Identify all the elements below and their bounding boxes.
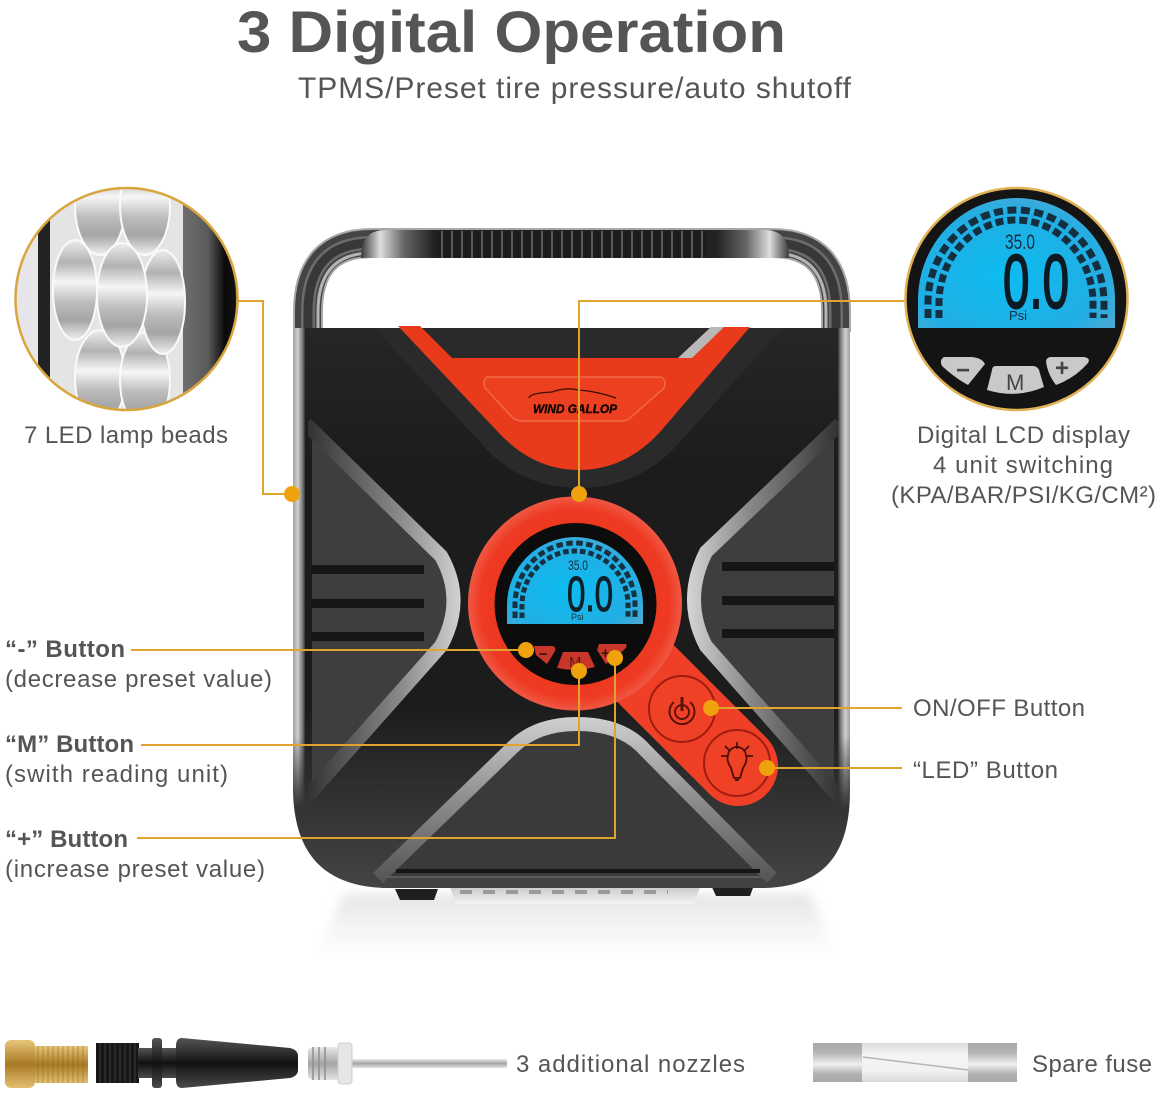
LCD plus button — [1046, 355, 1089, 385]
black cone nozzle — [96, 1038, 298, 1088]
gauge ring — [468, 496, 682, 710]
tire inflator product — [293, 230, 850, 958]
small plus button: + — [601, 645, 610, 662]
small LCD preset value: 35.0 — [568, 557, 588, 573]
minus button label — [5, 636, 272, 693]
handle grip — [361, 230, 789, 258]
brand name: WIND GALLOP — [533, 402, 618, 416]
spare fuse label: Spare fuse — [1032, 1051, 1152, 1078]
leader line: M button — [141, 671, 579, 745]
body — [293, 328, 850, 888]
LCD tick rings — [928, 210, 1104, 318]
brand car outline — [529, 389, 616, 398]
small plus button — [597, 644, 627, 664]
plus button label — [5, 826, 265, 883]
LED button label: “LED” Button — [913, 757, 1058, 784]
top red housing — [374, 326, 782, 488]
gauge face — [494, 523, 656, 685]
leader line: LED button — [767, 767, 902, 769]
vent strip — [446, 876, 704, 904]
rubber feet — [395, 885, 754, 900]
leader line: power button — [711, 707, 902, 709]
leader line: LCD — [579, 301, 906, 494]
nozzles label: 3 additional nozzles — [516, 1051, 745, 1078]
icon: power — [670, 697, 694, 724]
LCD screen — [918, 198, 1115, 328]
side rails — [293, 328, 850, 808]
LED lenses — [52, 190, 186, 409]
M button label: (swith reading unit) — [5, 761, 228, 788]
LCD minus button: − — [956, 357, 970, 384]
LCD M button: M — [1006, 370, 1024, 395]
plus button label: “+” Button — [5, 826, 128, 853]
LCD minus button — [941, 357, 985, 385]
power button — [649, 676, 715, 742]
chrome notch edge — [678, 327, 724, 358]
plus button label: (increase preset value) — [5, 856, 265, 883]
M button label — [5, 731, 228, 788]
handle — [308, 230, 836, 332]
left panel — [306, 424, 454, 798]
LCD M button — [987, 366, 1044, 395]
subtitle: TPMS/Preset tire pressure/auto shutoff — [298, 72, 852, 105]
logo badge — [484, 377, 665, 421]
minus button label: “-” Button — [5, 636, 125, 663]
title: 3 Digital Operation — [237, 0, 786, 65]
LED button — [704, 730, 770, 796]
small M button: M — [569, 654, 582, 671]
right panel — [694, 424, 840, 798]
control handle — [640, 668, 738, 766]
minus button label: (decrease preset value) — [5, 666, 272, 693]
LCD description: 4 unit switching — [933, 452, 1113, 479]
small LCD screen — [507, 537, 643, 624]
bottom panel — [378, 724, 772, 878]
small LCD reading: 0.0 — [567, 568, 613, 622]
small minus button: − — [539, 646, 548, 663]
small LCD unit: Psi — [571, 612, 584, 622]
power button label: ON/OFF Button — [913, 695, 1085, 722]
brass nozzle — [5, 1040, 88, 1088]
small minus button — [534, 646, 555, 664]
lamp beads label: 7 LED lamp beads — [24, 422, 228, 449]
right vent slots — [722, 562, 835, 638]
small LCD tick rings — [515, 543, 635, 618]
LCD unit: Psi — [1009, 308, 1027, 323]
LCD preset value: 35.0 — [1005, 231, 1035, 254]
silver needle nozzle — [308, 1043, 507, 1084]
leader dots — [284, 486, 775, 776]
LCD description — [891, 422, 1156, 509]
LCD description: Digital LCD display — [917, 422, 1130, 449]
left vent slots — [311, 565, 424, 641]
icon: light bulb — [721, 742, 753, 780]
LCD plus button: + — [1055, 355, 1069, 382]
LCD description: (KPA/BAR/PSI/KG/CM²) — [891, 482, 1156, 509]
LCD close-up — [906, 188, 1128, 410]
lamp beads close-up — [14, 186, 239, 412]
spare fuse — [813, 1043, 1017, 1082]
leader line: minus button — [131, 649, 526, 651]
M button label: “M” Button — [5, 731, 134, 758]
small M button — [557, 652, 595, 671]
leader line: lamp beads — [238, 301, 292, 494]
LCD reading: 0.0 — [1003, 240, 1069, 325]
reflection under the inflator — [312, 894, 838, 958]
leader line: plus button — [137, 658, 615, 838]
bottom panel base line — [396, 869, 760, 873]
